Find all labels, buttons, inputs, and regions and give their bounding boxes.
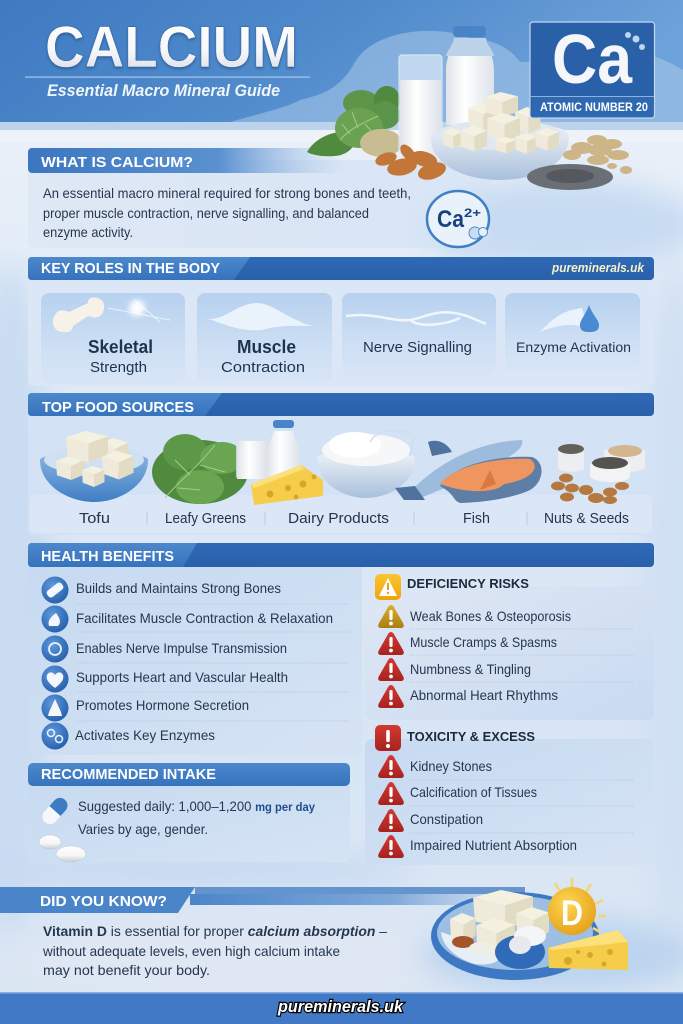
benefit: key enzymes xyxy=(42,722,215,750)
element tile: Ca atomic number 20 xyxy=(530,20,654,118)
card: nerve signalling: Nerve Signalling xyxy=(363,340,472,356)
leafy greens xyxy=(307,86,402,157)
food labels: Tofu xyxy=(79,511,110,527)
food: milk glass and bottle xyxy=(236,420,300,479)
heading bar: HEALTH BENEFITS xyxy=(41,548,174,565)
element tile: Ca atomic number 20: Ca xyxy=(552,20,633,98)
food: seeds and nuts xyxy=(551,444,645,504)
illustration: vitamin D foods xyxy=(431,878,628,980)
icon: enzyme droplet xyxy=(540,305,599,332)
vitamin D sun xyxy=(548,878,606,935)
risk: weak bones xyxy=(378,605,571,628)
benefit: strong bones: Builds and Maintains Strong Bones xyxy=(76,580,281,596)
icon: Ca2+ ion: Ca xyxy=(437,206,465,233)
description text: enzyme activity. xyxy=(43,224,133,240)
benefit: heart health xyxy=(42,666,288,692)
subtitle: Essential Macro Mineral Guide xyxy=(47,81,280,100)
risk: numbness: Numbness & Tingling xyxy=(410,661,531,677)
benefit: muscle contraction xyxy=(42,606,333,632)
danger badge xyxy=(375,725,401,751)
title: CALCIUM xyxy=(45,15,298,80)
panel: toxicity and excess xyxy=(365,725,653,865)
card: enzyme activation: Enzyme Activation xyxy=(516,340,631,355)
risk: numbness xyxy=(378,658,531,681)
did you know text: Vitamin D is essential for proper calcium absorption – xyxy=(43,923,387,939)
icon: nerve cell xyxy=(346,312,486,325)
intake text: Varies by age, gender. xyxy=(78,821,208,837)
description text: An essential macro mineral required for strong bones and teeth, xyxy=(43,185,411,201)
heading bar: RECOMMENDED INTAKE xyxy=(41,766,216,783)
benefit: hormone secretion: Promotes Hormone Secretion xyxy=(76,697,249,713)
risk: weak bones: Weak Bones & Osteoporosis xyxy=(410,608,571,624)
benefit: hormone secretion xyxy=(42,694,249,722)
heading bar: WHAT IS CALCIUM? xyxy=(41,154,193,171)
tofu blocks xyxy=(473,890,533,929)
milk bottle xyxy=(446,26,494,125)
glass of milk xyxy=(399,55,442,155)
card: enzyme activation xyxy=(505,293,640,371)
vitamin D sun: D xyxy=(561,894,583,933)
description text xyxy=(43,185,411,240)
tofu bowl xyxy=(431,92,569,180)
heading bar xyxy=(28,393,654,416)
blue dish with pills xyxy=(495,935,545,969)
food labels: Leafy Greens xyxy=(165,511,246,527)
panel: did you know xyxy=(0,878,628,980)
heading bar: DID YOU KNOW? xyxy=(40,893,167,910)
did you know text xyxy=(42,923,387,978)
almonds xyxy=(374,142,448,183)
intake text xyxy=(78,798,315,837)
heading bar: TOP FOOD SOURCES xyxy=(42,399,194,416)
icon: bone xyxy=(53,297,170,332)
risk: cramps xyxy=(378,632,557,655)
heading bar xyxy=(28,148,348,173)
card: skeletal strength: Skeletal xyxy=(88,337,153,357)
benefit: nerve impulse xyxy=(42,636,287,662)
heading bar xyxy=(0,887,530,913)
description text: proper muscle contraction, nerve signalling, and balanced xyxy=(43,205,369,221)
header band xyxy=(0,0,683,142)
food labels: Fish xyxy=(463,511,490,527)
footer bar: pureminerals.uk xyxy=(277,997,404,1016)
panel: health benefits xyxy=(28,543,654,755)
risk: kidney stones: Kidney Stones xyxy=(410,758,492,774)
icon: Ca2+ ion xyxy=(427,191,489,247)
footer bar xyxy=(0,992,683,1024)
cheese wedge xyxy=(548,930,628,970)
risk: nutrient absorption: Impaired Nutrient Absorption xyxy=(410,837,577,853)
panel: top food sources xyxy=(28,393,654,535)
panel: recommended intake xyxy=(28,763,350,862)
risk: constipation: Constipation xyxy=(410,811,483,827)
risk: constipation xyxy=(378,809,483,832)
card: skeletal strength: Strength xyxy=(90,360,147,376)
benefit: nerve impulse: Enables Nerve Impulse Transmission xyxy=(76,640,287,656)
card: skeletal strength xyxy=(41,293,185,384)
risk: nutrient absorption xyxy=(378,835,577,858)
heading bar xyxy=(28,257,654,280)
food: salmon steak xyxy=(440,457,542,503)
heading bar xyxy=(28,763,350,786)
did you know text: may not benefit your body. xyxy=(43,962,210,978)
food: leafy greens xyxy=(152,434,248,504)
risk: cramps: Muscle Cramps & Spasms xyxy=(410,634,557,650)
peanuts and seeds xyxy=(527,135,632,190)
risk: kidney stones xyxy=(378,755,492,778)
did you know text: without adequate levels, even high calcium intake xyxy=(42,943,340,959)
food labels: Nuts & Seeds xyxy=(544,511,629,527)
icon: capsule xyxy=(39,795,71,827)
risk: calcification xyxy=(378,782,537,805)
card: nerve signalling xyxy=(342,293,496,376)
risk: heart rhythms: Abnormal Heart Rhythms xyxy=(410,687,558,703)
heading bar: KEY ROLES IN THE BODY xyxy=(41,260,220,277)
benefit: muscle contraction: Facilitates Muscle Contraction & Relaxation xyxy=(76,610,333,626)
plate xyxy=(431,892,599,980)
benefit: strong bones xyxy=(42,576,281,604)
warning badge xyxy=(375,574,401,600)
card: muscle contraction xyxy=(197,293,332,383)
risk: heart rhythms xyxy=(378,685,558,708)
panel: toxicity and excess: TOXICITY & EXCESS xyxy=(407,729,535,744)
food labels xyxy=(79,511,629,527)
panel: deficiency risks: DEFICIENCY RISKS xyxy=(407,576,529,591)
food: cheese xyxy=(251,465,323,505)
illustration: hero calcium foods xyxy=(307,26,632,190)
food: fish xyxy=(395,440,522,500)
benefit: heart health: Supports Heart and Vascular Health xyxy=(76,669,288,685)
food: yogurt bowl xyxy=(317,431,415,498)
icon: Ca2+ ion: 2+ xyxy=(464,206,481,220)
panel: key roles in the body xyxy=(28,257,654,386)
card: muscle contraction: Contraction xyxy=(221,360,305,376)
icon: tablets xyxy=(39,835,86,862)
intake text: Suggested daily: 1,000–1,200 mg per day xyxy=(78,798,315,814)
card: muscle contraction: Muscle xyxy=(237,337,296,357)
heading bar xyxy=(28,543,654,567)
food labels: Dairy Products xyxy=(288,511,389,527)
panel: deficiency risks xyxy=(365,574,654,720)
benefit: key enzymes: Activates Key Enzymes xyxy=(75,727,215,743)
icon: muscle fibre xyxy=(208,303,312,330)
element tile: Ca atomic number 20: ATOMIC NUMBER 20 xyxy=(540,102,648,114)
heading bar: pureminerals.uk xyxy=(551,261,645,275)
risk: calcification: Calcification of Tissues xyxy=(410,784,537,800)
panel: what is calcium xyxy=(28,148,490,248)
food: tofu bowl xyxy=(40,431,148,502)
